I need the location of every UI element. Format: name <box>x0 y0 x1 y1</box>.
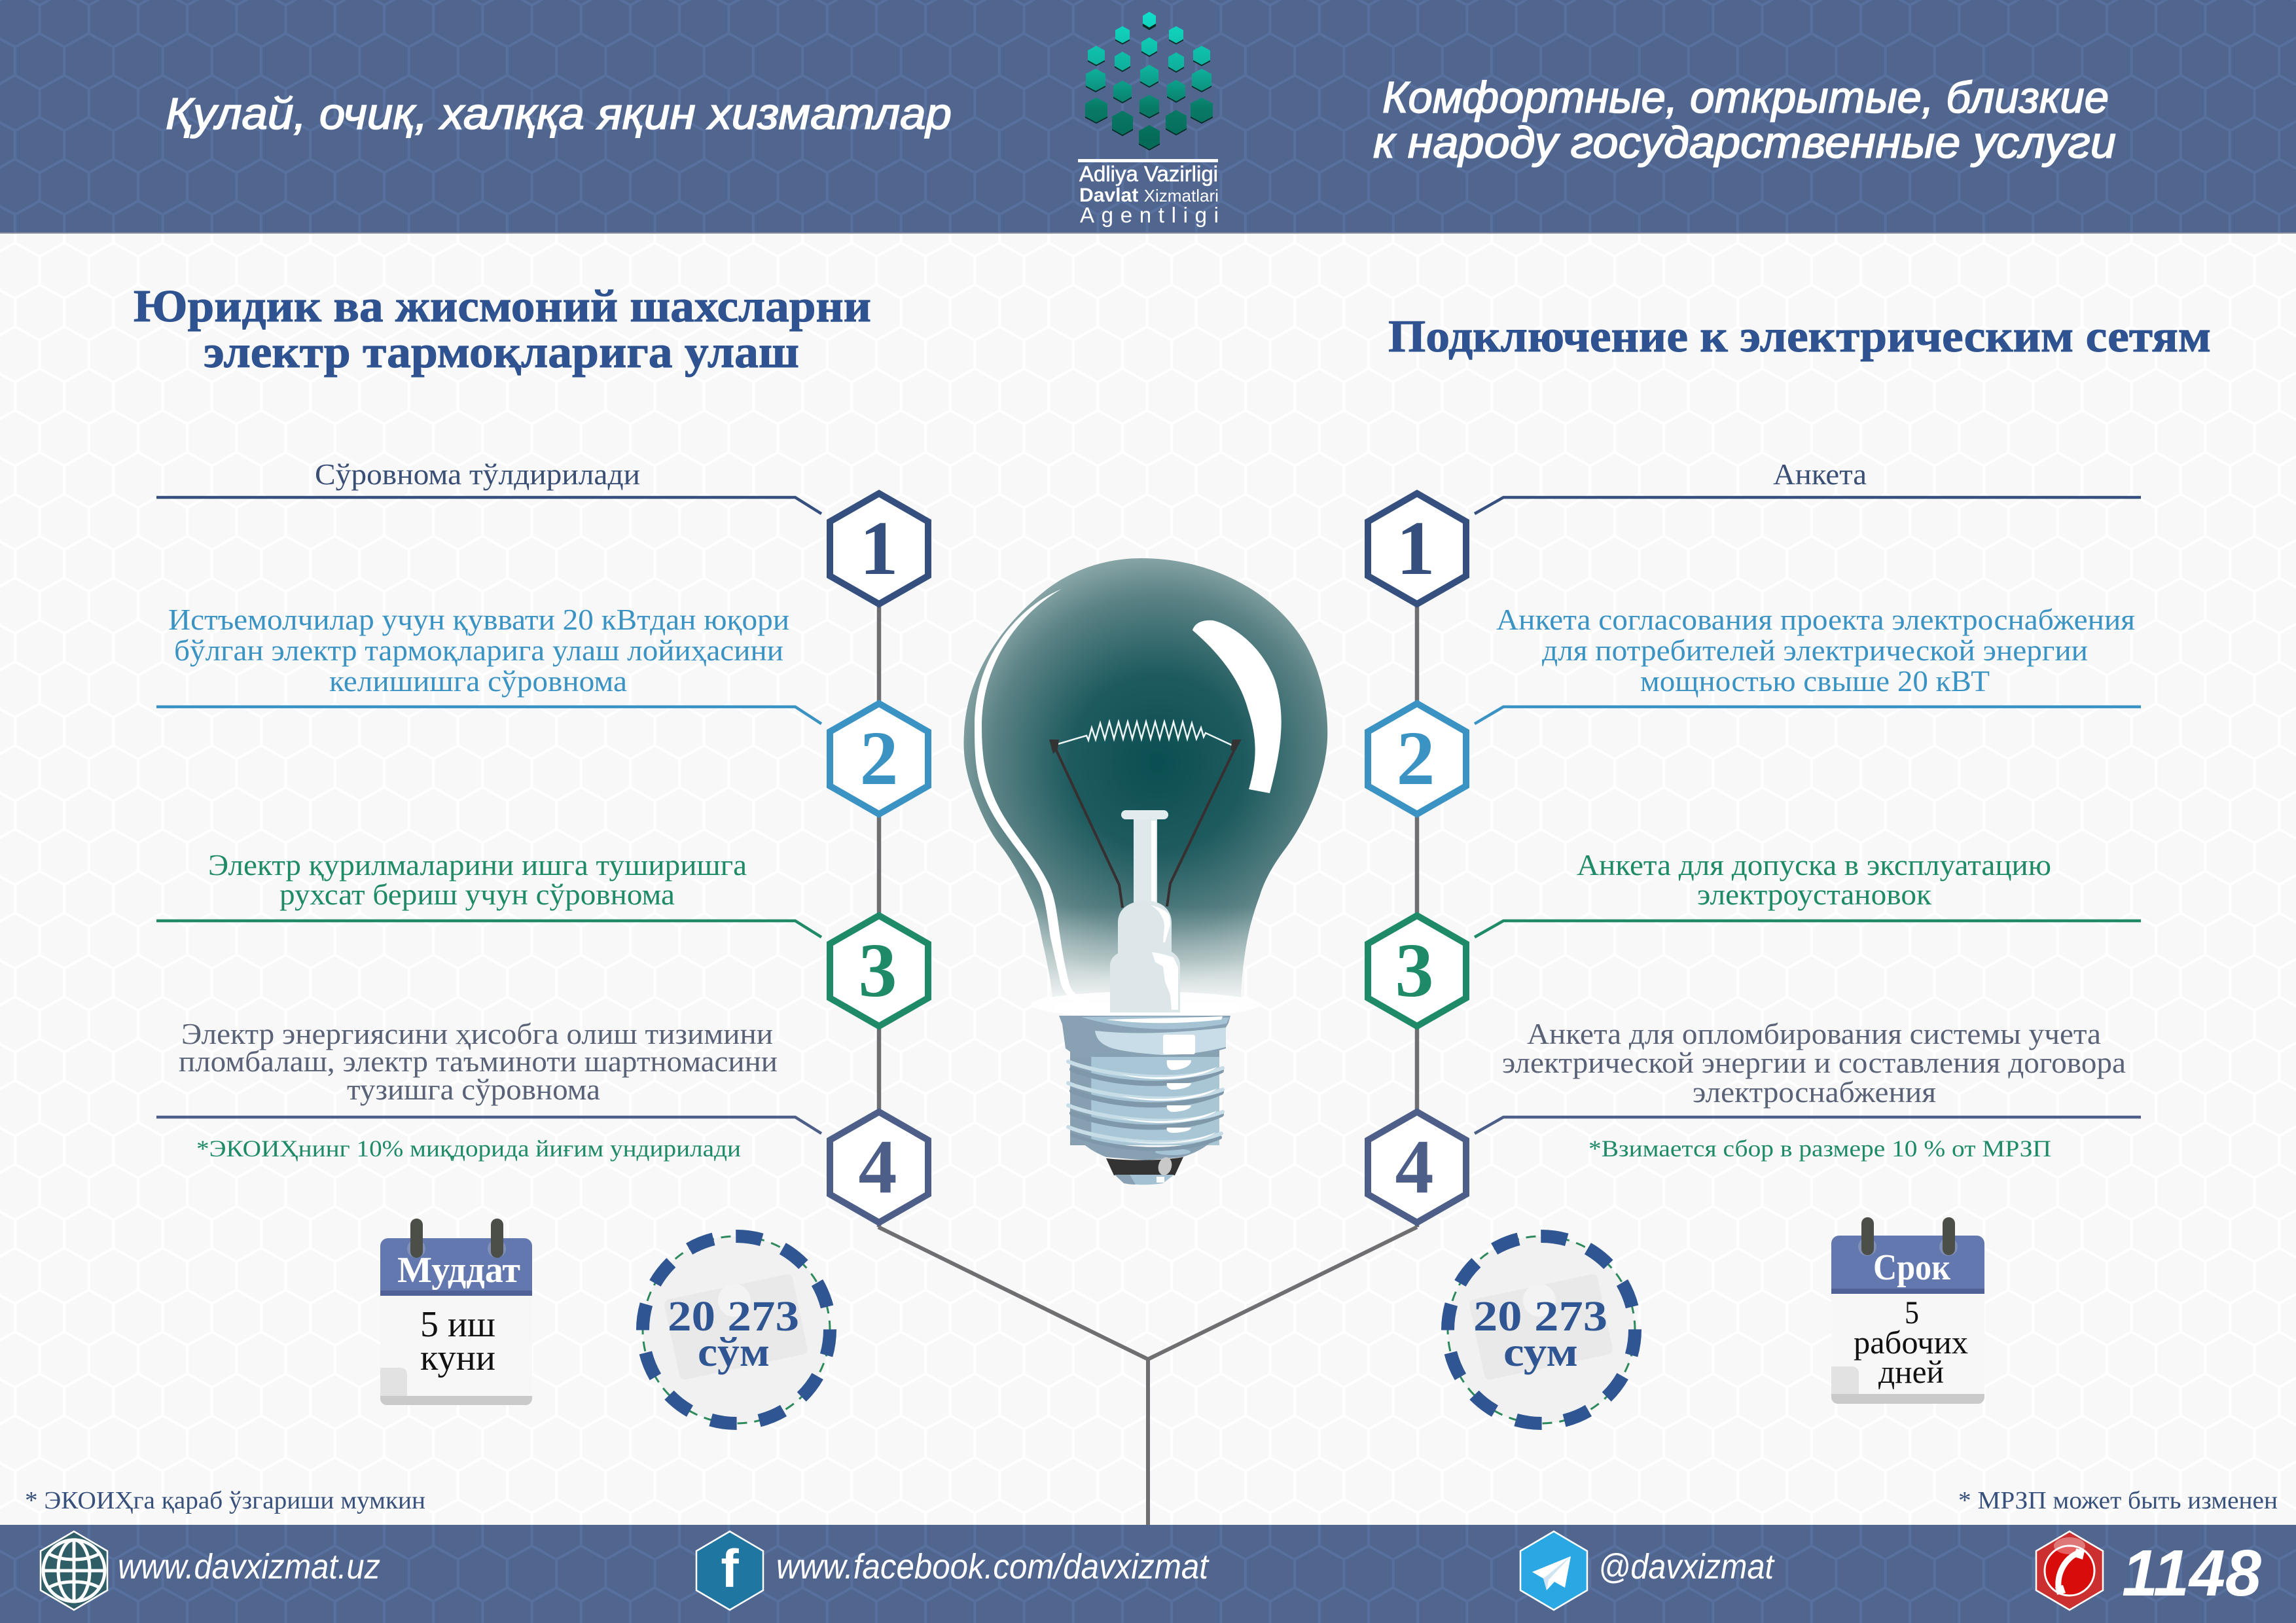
bottom dome <box>1075 1135 1215 1160</box>
step 4 left: text and leader <box>156 1017 821 1133</box>
price badge left <box>642 1236 831 1424</box>
step 3 right: text and leader <box>1475 848 2141 937</box>
header slogan: Russian: Комфортные, открытые, близкие <box>1382 73 2109 122</box>
number badge 4 right <box>1368 1112 1466 1222</box>
number badge 3 right: 3 <box>1395 927 1433 1013</box>
logo wordmark: Agentligi <box>1080 203 1219 227</box>
price badge right <box>1447 1236 1636 1424</box>
logo hexagon cluster <box>1085 12 1213 151</box>
calendar: term, right: 5 <box>1905 1294 1919 1330</box>
icon: phone <box>2036 1531 2103 1610</box>
light bulb illustration <box>956 553 1335 1185</box>
fee note right: *Взимается сбор в размере 10 % от МРЗП <box>1588 1135 2051 1162</box>
number badge 3 right <box>1368 916 1466 1026</box>
header slogan: Uzbek: Қулай, очиқ, халққа яқин хизматлар <box>166 89 952 139</box>
base glow <box>1031 991 1260 1018</box>
header band <box>0 0 2296 234</box>
calendar: term, left <box>380 1219 532 1405</box>
step 3 left: text and leader: Электр қурилмаларини ишга туширишга <box>208 848 747 882</box>
title left: Юридик ва жисмоний шахсларни <box>134 281 871 332</box>
metal tip <box>1106 1157 1183 1175</box>
number badge 3 left <box>830 916 928 1026</box>
right column: steps <box>1368 457 2141 1222</box>
filament <box>1049 722 1242 908</box>
step 4 right: text and leader <box>1475 1017 2141 1133</box>
step 1 left: text and leader <box>156 457 821 514</box>
upper collar <box>1059 1016 1230 1057</box>
facebook address: www.facebook.com/davxizmat <box>776 1547 1210 1586</box>
step 2 right: text and leader: для потребителей электрической энергии <box>1542 633 2088 667</box>
icon: telegram <box>1520 1531 1587 1610</box>
step 2 right: text and leader <box>1475 603 2141 724</box>
logo wordmark: Davlat Xizmatlari <box>1079 185 1219 206</box>
step 3 left: text and leader <box>156 848 821 937</box>
number badge 1 left: 1 <box>860 505 898 591</box>
number badge 1 right: 1 <box>1397 505 1435 591</box>
number badge 4 left: 4 <box>859 1124 897 1209</box>
number badge 2 left <box>830 704 928 814</box>
hotline number: 1148 <box>2122 1537 2261 1610</box>
step 2 right: text and leader: Анкета согласования проекта электроснабжения <box>1496 603 2135 636</box>
fee note left: *ЭКОИҲнинг 10% миқдорида йиғим ундирилади <box>196 1135 741 1162</box>
connector tree <box>878 605 1417 1526</box>
website: www.davxizmat.uz <box>118 1547 380 1586</box>
step 4 right: text and leader: электроснабжения <box>1693 1075 1936 1109</box>
calendar: term, right: рабочих <box>1854 1324 1968 1361</box>
step 1 right: text and leader: Анкета <box>1773 457 1867 491</box>
icon: facebook: f <box>721 1539 739 1599</box>
bulb glass <box>956 553 1335 1018</box>
calendar: term, right <box>1831 1217 1984 1404</box>
footer band <box>0 1525 2296 1623</box>
calendar: term, right: Срок <box>1873 1247 1951 1288</box>
number badge 2 right <box>1368 704 1466 814</box>
step 2 left: text and leader: келишишга сўровнома <box>329 664 627 698</box>
number badge 2 left: 2 <box>860 715 898 801</box>
thread 4 <box>1068 1127 1221 1149</box>
number badge 4 right: 4 <box>1395 1124 1433 1209</box>
glass rim reflection <box>975 589 1088 1003</box>
screw base <box>1059 1016 1230 1185</box>
step 4 right: text and leader: электрической энергии и составления договора <box>1502 1046 2126 1079</box>
step 3 right: text and leader: Анкета для допуска в эксплуатацию <box>1577 848 2051 882</box>
logo wordmark <box>1079 162 1219 227</box>
number badge 1 right <box>1368 493 1466 604</box>
glass highlight <box>1193 620 1282 793</box>
step 2 left: text and leader: бўлган электр тармоқларига улаш лойиҳасини <box>174 633 783 667</box>
step 2 right: text and leader: мощностью свыше 20 кВТ <box>1640 664 1990 698</box>
thread 3 <box>1068 1105 1223 1127</box>
price badge right: 20 273 <box>1473 1293 1607 1340</box>
thread 2 <box>1068 1083 1223 1105</box>
step 2 left: text and leader <box>156 603 821 724</box>
calendar: term, left: куни <box>420 1338 495 1378</box>
step 2 left: text and leader: Истъемолчилар учун қуввати 20 кВтдан юқори <box>168 603 789 636</box>
icon: facebook <box>696 1531 763 1610</box>
icon: globe <box>41 1531 107 1610</box>
title left <box>134 281 871 378</box>
header slogan: Russian <box>1373 73 2116 168</box>
calendar: term, left: 5 иш <box>420 1304 495 1345</box>
price badge left: сўм <box>698 1329 770 1375</box>
step 3 right: text and leader: электроустановок <box>1697 878 1932 911</box>
number badge 3 left: 3 <box>859 927 897 1013</box>
thread 1 <box>1068 1060 1223 1083</box>
calendar: term, right: дней <box>1878 1353 1944 1390</box>
threaded body <box>1070 1047 1219 1145</box>
step 3 left: text and leader: рухсат бериш учун сўровнома <box>279 878 675 911</box>
number badge 4 left <box>830 1112 928 1222</box>
price badge right: сум <box>1503 1329 1578 1375</box>
footnote right: * МРЗП может быть изменен <box>1958 1487 2278 1514</box>
price badge left: 20 273 <box>668 1293 799 1340</box>
number badge 2 right: 2 <box>1397 715 1435 801</box>
agency logo <box>1078 12 1219 227</box>
glass stem and collars <box>1110 810 1180 1012</box>
left column: steps <box>156 457 928 1222</box>
header slogan: Russian: к народу государственные услуги <box>1373 118 2116 168</box>
step 4 left: text and leader: пломбалаш, электр таъминоти шартномасини <box>179 1044 778 1078</box>
step 1 left: text and leader: Сўровнома тўлдирилади <box>315 457 640 491</box>
step 4 right: text and leader: Анкета для опломбирования системы учета <box>1527 1017 2101 1050</box>
telegram handle: @davxizmat <box>1598 1547 1775 1586</box>
step 4 left: text and leader: Электр энергиясини ҳисобга олиш тизимини <box>181 1017 773 1050</box>
logo wordmark: Adliya Vazirligi <box>1079 162 1218 186</box>
title left: электр тармоқларига улаш <box>204 327 799 378</box>
title right: Подключение к электрическим сетям <box>1388 312 2211 362</box>
calendar: term, left: Муддат <box>397 1250 520 1291</box>
step 4 left: text and leader: тузишга сўровнома <box>347 1073 600 1106</box>
step 1 right: text and leader <box>1475 457 2141 514</box>
number badge 1 left <box>830 493 928 604</box>
footnote left: * ЭКОИҲга қараб ўзгариши мумкин <box>25 1487 425 1514</box>
